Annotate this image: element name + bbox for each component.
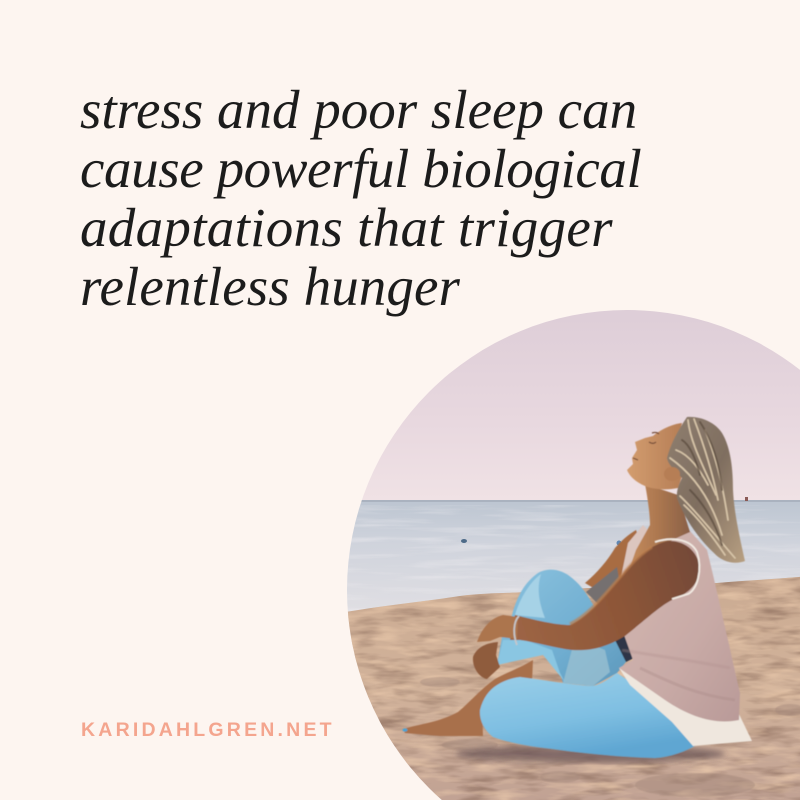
toe polish xyxy=(402,728,408,732)
dark gap under arm xyxy=(615,636,633,662)
woman xyxy=(402,417,752,763)
footer website: KARIDAHLGREN.NET xyxy=(81,719,335,741)
arm xyxy=(510,541,700,650)
hair xyxy=(667,417,745,563)
shin and foot xyxy=(403,660,533,736)
title: cause powerful biological xyxy=(80,138,641,199)
title: adaptations that trigger xyxy=(80,197,613,258)
face xyxy=(627,423,684,489)
white under layer xyxy=(619,668,752,746)
neck and chest xyxy=(631,486,690,564)
ear xyxy=(664,466,680,478)
sky xyxy=(340,305,800,501)
arm highlight xyxy=(570,547,652,624)
far arm xyxy=(585,530,642,592)
sand xyxy=(340,576,800,800)
title: stress and poor sleep can xyxy=(80,79,637,140)
armhole trim xyxy=(655,539,699,599)
title: relentless hunger xyxy=(80,256,460,317)
ground shadow xyxy=(455,745,725,763)
sleeveless top xyxy=(618,525,740,721)
title xyxy=(80,79,641,317)
lower leg pants xyxy=(480,673,700,758)
lower hand xyxy=(473,642,500,679)
sea xyxy=(340,497,800,620)
closed eye and mouth xyxy=(633,432,659,460)
bracelet xyxy=(514,616,519,645)
upper hand xyxy=(477,615,518,642)
photo: woman sitting on beach in circular crop xyxy=(347,310,800,800)
raised knee pants xyxy=(497,570,630,686)
book xyxy=(586,567,620,606)
